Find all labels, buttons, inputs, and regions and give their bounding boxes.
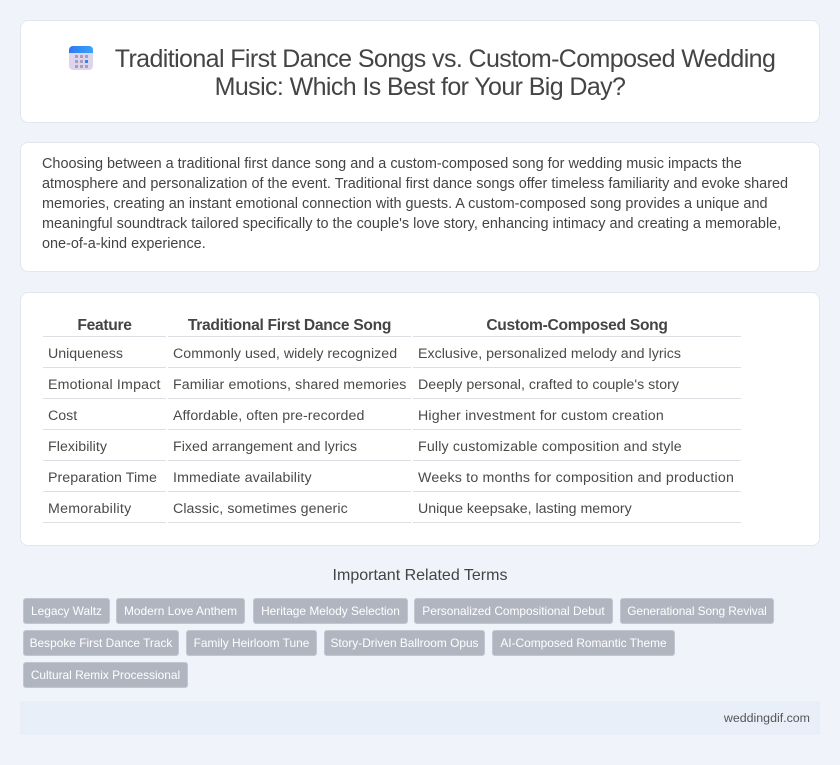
comparison table: Familiar emotions, shared memories: [173, 377, 407, 393]
text block: introduction: atmosphere and personalization of the event. Traditional first dance songs offer timeless familiarity and evoke shared: [42, 176, 788, 192]
comparison table: Fixed arrangement and lyrics: [173, 439, 357, 455]
related term tags: Story-Driven Ballroom Opus: [330, 636, 479, 650]
comparison table: Commonly used, widely recognized: [173, 346, 397, 362]
comparison table: Preparation Time: [48, 470, 157, 486]
comparison table: Uniqueness: [48, 346, 123, 362]
text block: introduction: memories, creating an instant emotional connection with guests. A custom-composed song provides a unique and: [42, 196, 768, 212]
comparison table: Emotional Impact: [48, 377, 161, 393]
comparison table: Fully customizable composition and style: [418, 439, 682, 455]
panel: header: [20, 20, 820, 123]
footer: site name: weddingdif.com: [724, 711, 810, 725]
title: Traditional First Dance Songs vs. Custom-Composed Wedding: [115, 45, 775, 73]
related term tags: [23, 598, 774, 688]
comparison table: Weeks to months for composition and production: [418, 470, 734, 486]
related term tags: Heritage Melody Selection: [261, 604, 400, 618]
related term tags: Cultural Remix Processional: [31, 668, 180, 682]
comparison table: Feature: [77, 317, 132, 334]
related term tags: AI-Composed Romantic Theme: [500, 636, 667, 650]
title: [115, 45, 775, 101]
title: Music: Which Is Best for Your Big Day?: [215, 73, 625, 101]
comparison table: Memorability: [48, 501, 131, 517]
comparison table: Cost: [48, 408, 77, 424]
text block: introduction: [42, 156, 788, 252]
related term tags: Family Heirloom Tune: [194, 636, 309, 650]
panel: comparison table: [20, 292, 820, 546]
panel: introduction: [20, 142, 820, 272]
comparison table: Traditional First Dance Song: [188, 317, 391, 334]
related term tags: Bespoke First Dance Track: [30, 636, 172, 650]
comparison table: [43, 317, 741, 523]
related term tags: Generational Song Revival: [627, 604, 767, 618]
text block: introduction: one-of-a-kind experience.: [42, 236, 206, 252]
comparison table: Higher investment for custom creation: [418, 408, 664, 424]
comparison table: Unique keepsake, lasting memory: [418, 501, 632, 517]
related term tags: Legacy Waltz: [31, 604, 102, 618]
comparison table: Flexibility: [48, 439, 107, 455]
comparison table: Exclusive, personalized melody and lyrics: [418, 346, 681, 362]
comparison table: Custom-Composed Song: [486, 317, 668, 334]
text block: introduction: meaningful soundtrack tailored specifically to the couple's love story, enhancing intimacy and creating a memorable,: [42, 216, 781, 232]
comparison table: Classic, sometimes generic: [173, 501, 348, 517]
comparison table: Immediate availability: [173, 470, 312, 486]
related term tags: Personalized Compositional Debut: [422, 604, 605, 618]
related term tags: Modern Love Anthem: [124, 604, 237, 618]
comparison table: Affordable, often pre-recorded: [173, 408, 364, 424]
comparison table: Deeply personal, crafted to couple's story: [418, 377, 679, 393]
footer: [20, 701, 820, 735]
icon: calendar: [69, 46, 93, 70]
heading: important related terms: Important Related Terms: [333, 567, 507, 584]
text block: introduction: Choosing between a traditional first dance song and a custom-composed song for wedding music impacts the: [42, 156, 742, 172]
